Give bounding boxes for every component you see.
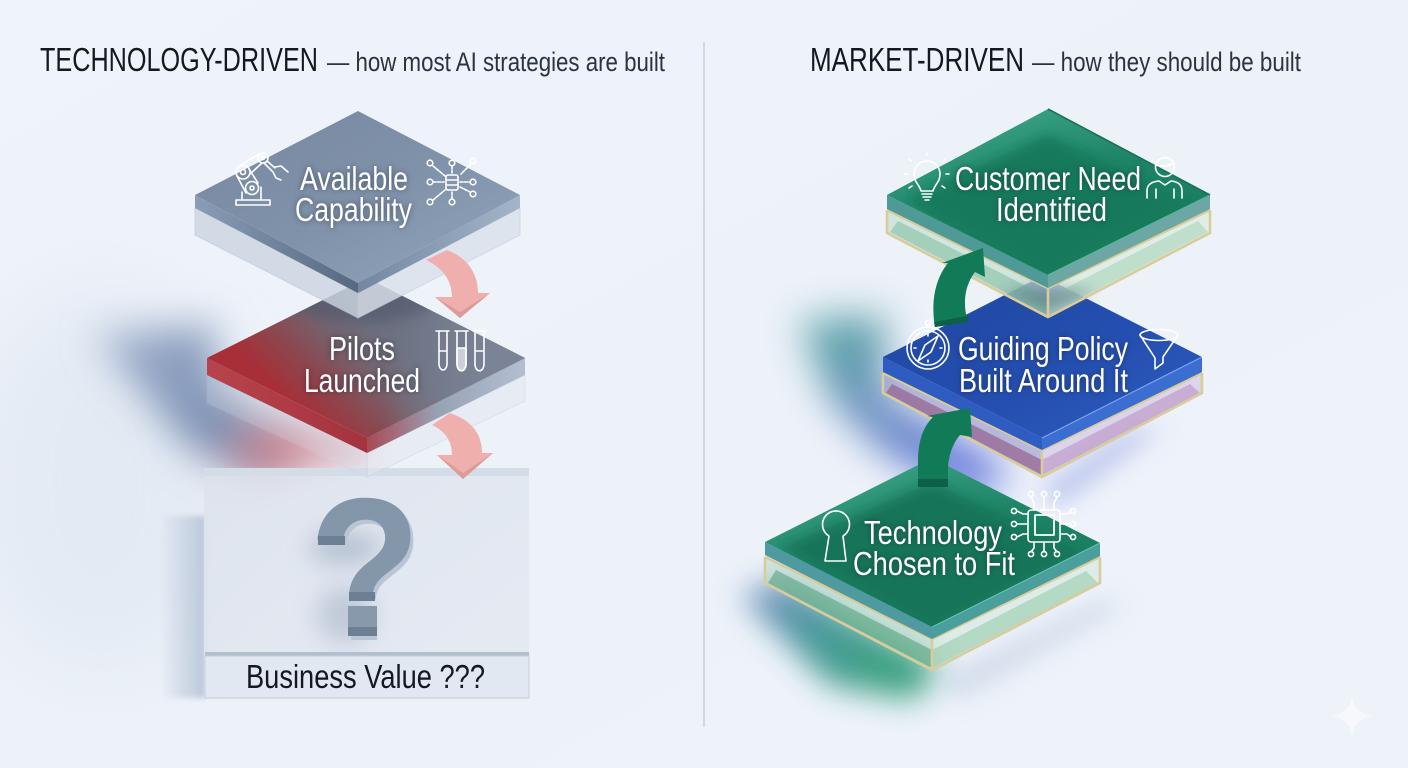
label: guiding policy built around it: Guiding Policy [958,330,1128,367]
panel: guiding policy slab [883,276,1202,477]
arrow: pink down 1 [426,250,490,318]
title: technology-driven: — how most AI strategies are built [327,47,665,77]
icon: keyhole [823,511,850,561]
icon: funnel [1140,330,1178,369]
label: guiding policy built around it [958,330,1128,399]
label: available capability: Available [300,160,408,197]
panel: customer need identified slab [887,109,1210,317]
panel: available capability slab [195,111,520,318]
label: business value [205,652,529,698]
title: technology-driven [40,41,665,78]
label: technology chosen to fit: Technology [864,514,1002,551]
label: customer need identified: Customer Need [955,160,1141,197]
label: pilots launched: Pilots [329,330,395,367]
label: pilots launched: Launched [304,362,420,399]
icon: chip [1011,491,1076,557]
arrow: green up bottom [918,408,972,487]
label: technology chosen to fit [853,514,1015,582]
label: customer need identified [955,160,1141,228]
panel: pilots launched slab [207,278,525,477]
icon: robot arm [236,153,288,205]
label: customer need identified: Identified [996,191,1107,228]
icon: light bulb [904,153,949,200]
watermark: sparkle [1332,696,1372,738]
title: market-driven: MARKET-DRIVEN [810,41,1024,78]
label: pilots launched [304,330,420,399]
panel: business value box [204,457,529,698]
label: business value: Business Value ??? [246,658,485,695]
soft floor shadows [0,290,1165,700]
icon: question mark: ? [309,457,421,678]
label: available capability [295,160,412,228]
title: technology-driven: TECHNOLOGY-DRIVEN [40,41,318,78]
divider [703,42,705,727]
icon: compass [907,321,949,369]
label: technology chosen to fit: Chosen to Fit [853,545,1015,582]
icon: person [1147,158,1182,198]
title: market-driven: — how they should be built [1032,47,1301,77]
title: market-driven [810,41,1301,78]
panel: technology chosen to fit slab [765,458,1100,670]
arrow: green up top [933,248,985,327]
label: available capability: Capability [295,191,412,228]
icon: test tubes [436,331,486,371]
arrow: pink down 2 [432,413,493,479]
icon: question mark: ? [312,461,424,682]
label: guiding policy built around it: Built Around It [959,362,1128,399]
icon: data network [427,158,476,205]
